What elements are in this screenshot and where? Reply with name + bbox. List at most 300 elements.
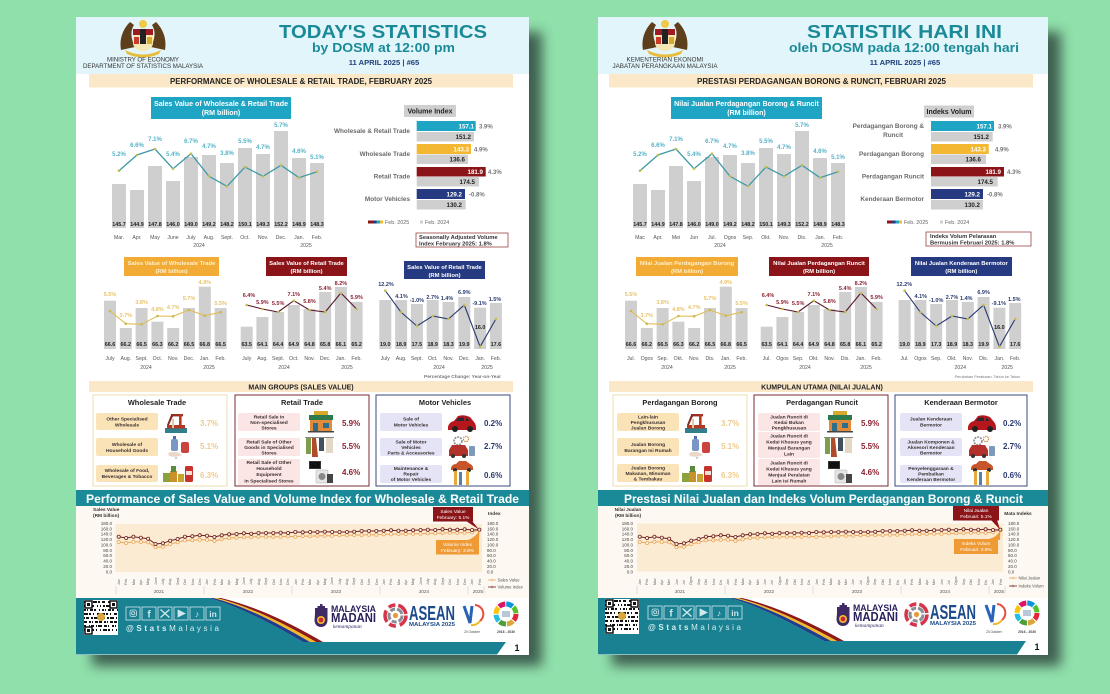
- bar values: 149.3: [777, 222, 791, 228]
- year labels: 2021: [675, 589, 686, 594]
- month labels: Nov: [367, 578, 371, 585]
- month axis: Apr.: [132, 235, 142, 241]
- bar values: 146.0: [687, 222, 701, 228]
- social icons: f: [669, 608, 673, 620]
- growth labels: 1.4%: [441, 296, 453, 302]
- growth labels: 5.9%: [870, 295, 883, 301]
- bar values: 17.5: [412, 342, 422, 348]
- header strip: [598, 17, 1048, 74]
- month axis: Dis.: [841, 356, 850, 362]
- month labels: June: [242, 577, 246, 585]
- growth line: [905, 291, 1015, 347]
- subtitle: by DOSM at 12:00 pm: [312, 40, 455, 55]
- item: parts and accessories: Parts & Accessories: [387, 450, 435, 456]
- bar group: runcit: Perdagangan Runcit: [862, 174, 925, 180]
- bar values: 66.6: [105, 342, 115, 348]
- item: barangan lain: [758, 432, 879, 458]
- callout: nilai jualan: Nilai Jualan: [964, 508, 989, 514]
- legend: Feb. 2024: [425, 220, 449, 226]
- item: barangan isi rumah: Barangan Isi Rumah: [624, 448, 672, 454]
- growth labels: 2.7%: [946, 295, 958, 301]
- month labels: Jul: [947, 580, 951, 585]
- chart title: (RM billion): [290, 269, 323, 275]
- item: non-specialised stores: [238, 411, 360, 432]
- month axis: Nov.: [258, 235, 268, 241]
- right axis title: Index: [488, 511, 501, 517]
- growth line: [247, 293, 357, 312]
- chart title: [266, 257, 347, 276]
- social icons: [126, 607, 220, 620]
- growth line: [385, 291, 496, 347]
- month axis: Oct.: [428, 356, 437, 362]
- month axis: Mei: [672, 235, 680, 241]
- month labels: Sep: [697, 579, 701, 585]
- item: wholesale of household goods: [96, 436, 218, 459]
- chart: time series of sales value and volume index: [76, 506, 529, 598]
- month labels: Aug: [345, 579, 349, 585]
- month axis: Apr.: [653, 235, 663, 241]
- month labels: Okt: [793, 579, 797, 585]
- bar values: 64.9: [289, 342, 299, 348]
- month labels: Feb: [213, 579, 217, 585]
- growth labels: 8.2%: [855, 281, 867, 287]
- month labels: June: [330, 577, 334, 585]
- growth labels: 5.5%: [272, 301, 284, 307]
- right axis: 80.0: [1008, 548, 1017, 553]
- panel heading: Wholesale Trade: [128, 398, 186, 407]
- growth labels: 6.7%: [705, 139, 719, 145]
- month labels: Dec: [375, 578, 379, 585]
- growth labels: 12.2%: [378, 282, 394, 288]
- month labels: Dec: [463, 578, 467, 585]
- month labels: Mac: [741, 578, 745, 585]
- growth labels: 4.7%: [688, 305, 701, 311]
- month axis: Dec.: [459, 356, 470, 362]
- chart title: (RM billion): [202, 109, 241, 117]
- bar values: 66.5: [657, 342, 668, 348]
- month labels: Apr: [748, 579, 752, 585]
- growth labels: 4.7%: [256, 145, 270, 151]
- item: parts and accessories: [380, 436, 502, 458]
- ministry name: [83, 56, 204, 70]
- banner heading: Performance of Sales Value and Volume Index for Wholesale & Retail Trade: [86, 492, 519, 506]
- bar values: 148.3: [831, 222, 845, 228]
- growth labels: 4.1%: [915, 294, 927, 300]
- bar values: 19.0: [380, 342, 391, 348]
- growth labels: 6.6%: [130, 143, 144, 149]
- bar values: 66.3: [152, 342, 163, 348]
- bar values: 152.2: [274, 222, 288, 228]
- month axis: Sept.: [272, 356, 284, 362]
- bar values: 148.9: [813, 222, 827, 228]
- date: 11 APRIL 2025 | #65: [870, 58, 941, 67]
- legend: Feb. 2024: [945, 220, 969, 226]
- banner heading: Prestasi Nilai Jualan dan Indeks Volum Perdagangan Borong & Runcit: [624, 492, 1023, 506]
- growth labels: -9.1%: [472, 301, 487, 307]
- bar group: retail: Retail Trade: [374, 174, 410, 180]
- month axis: 2025: [203, 365, 215, 371]
- indeks volum heading: [924, 106, 974, 118]
- bar group: wholesale and retail: 151.2: [456, 134, 472, 141]
- month labels: July: [338, 578, 342, 585]
- month labels: Aug: [433, 579, 437, 585]
- icon: coat of arms: [120, 20, 166, 58]
- bar values: 66.1: [856, 342, 866, 348]
- month labels: June: [419, 577, 423, 585]
- item: jualan kenderaan: Jualan Kenderaan: [910, 416, 952, 422]
- bar group: motor vehicles: [365, 189, 485, 210]
- item: maintenance and repair: Maintenance &: [394, 466, 429, 472]
- panel heading: Motor Vehicles: [419, 398, 471, 407]
- chart title: Nilai Jualan Kenderaan Bermotor: [915, 261, 1008, 267]
- item: makanan minuman tembakau: 6.3%: [721, 471, 739, 480]
- item: wholesale of food: [96, 465, 218, 482]
- right axis: 100.0: [1008, 542, 1020, 548]
- growth labels: 4.6%: [813, 149, 827, 155]
- item: sale of motor vehicles: Sale of: [403, 416, 419, 422]
- growth labels: 5.2%: [633, 152, 647, 158]
- month axis: Ogos: [724, 235, 737, 241]
- month axis: Jul.: [901, 356, 909, 362]
- month axis: Feb.: [351, 356, 362, 362]
- growth labels: 4.8%: [672, 307, 685, 313]
- logo: sdg wheel: 2016 - 2030: [1018, 630, 1036, 634]
- item: makanan minuman tembakau: Jualan Borong: [631, 466, 665, 472]
- sales value line: [640, 530, 1000, 547]
- bar values: 152.2: [795, 222, 809, 228]
- left axis: 40.0: [103, 559, 112, 564]
- social icons: [648, 606, 742, 620]
- year labels: 2022: [764, 589, 775, 594]
- bar values: 149.0: [705, 222, 719, 228]
- month labels: Mei: [932, 579, 936, 585]
- qr code: [84, 600, 118, 635]
- item: household equipment: in Specialised Stores: [244, 478, 294, 484]
- bar values: 66.1: [336, 342, 346, 348]
- chart title: Sales Value of Wholesale Trade: [128, 261, 216, 267]
- growth labels: 5.7%: [704, 296, 716, 302]
- item: non-specialised stores: Non-specialised: [250, 420, 288, 426]
- month labels: Dec: [286, 578, 290, 585]
- bar values: 145.7: [112, 222, 126, 228]
- bars: [379, 297, 502, 349]
- growth labels: 4.8%: [151, 307, 164, 313]
- item: barangan lain: Lain: [784, 452, 794, 458]
- year labels: 2025: [994, 589, 1005, 594]
- bar group: runcit: 4.3%: [1007, 170, 1021, 176]
- bar values: 16.0: [475, 325, 485, 331]
- month labels: Jun: [851, 579, 855, 585]
- bars: [241, 287, 363, 349]
- item: maintenance and repair: [380, 461, 502, 485]
- panel: perdagangan runcit: [754, 395, 888, 486]
- item: non-specialised stores: Stores: [261, 426, 277, 432]
- bar group: borong dan runcit: Perdagangan Borong &: [853, 123, 924, 130]
- month labels: Jan: [470, 579, 474, 585]
- month labels: Aug: [257, 579, 261, 585]
- month labels: Jan: [294, 579, 298, 585]
- growth labels: -9.1%: [992, 301, 1006, 307]
- month labels: Jul: [682, 580, 686, 585]
- item: peralatan isi rumah: Menjual Peralatan: [768, 472, 810, 478]
- left axis title: Nilai Jualan: [615, 507, 641, 513]
- social icons: ♪: [717, 608, 721, 618]
- ministry name: JABATAN PERANGKAAN MALAYSIA: [612, 63, 718, 70]
- month labels: Feb: [478, 579, 482, 585]
- item: lain-lain pengkhususan: Lain-lain: [638, 414, 658, 420]
- growth labels: -1.0%: [410, 298, 424, 304]
- month labels: May: [235, 578, 239, 585]
- callout: volume index: February: 3.9%: [441, 548, 475, 554]
- growth labels: 7.1%: [288, 292, 300, 298]
- month labels: Jan: [382, 579, 386, 585]
- growth labels: 1.5%: [1008, 297, 1021, 303]
- left axis: 140.0: [101, 532, 112, 537]
- growth labels: 5.5%: [104, 292, 116, 298]
- item: peralatan isi rumah: Lain Isi Rumah: [772, 478, 806, 484]
- bar values: 66.2: [642, 342, 652, 348]
- month axis: Dec.: [184, 356, 194, 362]
- month axis: July: [381, 356, 390, 362]
- panel heading: Retail Trade: [281, 398, 323, 407]
- month labels: Jul: [859, 580, 863, 585]
- month labels: Mac: [829, 578, 833, 585]
- item: household equipment: [238, 459, 360, 485]
- month labels: Mei: [756, 579, 760, 585]
- month labels: Dec: [198, 578, 202, 585]
- month labels: Apr: [925, 579, 929, 585]
- item: sale of motor vehicles: Motor Vehicles: [394, 422, 429, 428]
- volume index line: [640, 529, 1000, 544]
- poster background: [598, 17, 1048, 655]
- left axis: 20.0: [624, 564, 633, 569]
- month axis: July: [242, 356, 252, 362]
- growth labels: 5.9%: [256, 300, 269, 306]
- month axis: Jan.: [200, 356, 210, 362]
- month axis: June: [167, 235, 179, 241]
- month axis: July: [186, 235, 196, 241]
- item: kedai bukan pengkhususan: [758, 411, 879, 432]
- month labels: Sept: [352, 578, 356, 585]
- left axis: 100.0: [622, 542, 633, 548]
- bar values: 19.9: [978, 342, 989, 348]
- bar group: runcit: 181.9: [986, 169, 1002, 176]
- bar values: 18.3: [963, 342, 973, 348]
- bar values: 150.1: [238, 222, 252, 228]
- chart title: Nilai Jualan Perdagangan Borong & Runcit: [674, 100, 819, 108]
- item: sale of motor vehicles: 0.2%: [484, 419, 502, 428]
- ministry name: MINISTRY OF ECONOMY: [107, 56, 179, 64]
- month labels: June: [154, 577, 158, 585]
- month axis: Jan.: [294, 235, 304, 241]
- item: wholesale of food: 6.3%: [200, 471, 218, 480]
- month axis: 2025: [300, 243, 312, 249]
- bar group: kenderaan bermotor: Kenderaan Bermotor: [860, 196, 925, 203]
- left axis: 180.0: [622, 521, 633, 526]
- bar group: wholesale: 136.6: [450, 156, 466, 164]
- bar group: retail: 181.9: [468, 169, 484, 176]
- item: komponen dan aksesori: 2.7%: [1003, 442, 1021, 451]
- right axis: 60.0: [1008, 553, 1017, 558]
- bar group: motor vehicles: 130.2: [447, 202, 463, 209]
- logo: malaysia madani: MALAYSIA: [853, 603, 898, 614]
- item: komponen dan aksesori: Bermotor: [920, 450, 942, 456]
- month axis: Aug.: [204, 235, 214, 241]
- seasonally adjusted note: Index February 2025: 1.8%: [419, 242, 492, 248]
- panel: retail trade: [235, 395, 369, 486]
- logo: hand sign: [986, 604, 1005, 634]
- month labels: Jan: [638, 579, 642, 585]
- month labels: Sep: [962, 579, 966, 585]
- month labels: July: [249, 578, 253, 585]
- bars: [899, 297, 1021, 349]
- poster: Malay edition: [598, 17, 1048, 655]
- growth labels: 8.2%: [335, 281, 347, 287]
- bar group: wholesale: 4.9%: [474, 148, 488, 154]
- growth labels: 6.9%: [977, 290, 990, 296]
- month axis: 2025: [341, 365, 353, 371]
- main groups heading: [609, 381, 1033, 392]
- growth labels: 6.4%: [243, 293, 255, 299]
- panel: motor vehicles: [376, 395, 510, 486]
- year labels: 2021: [154, 589, 165, 594]
- item: jualan kenderaan: [900, 413, 1021, 432]
- growth labels: 6.6%: [651, 143, 665, 149]
- growth labels: 3.8%: [220, 151, 234, 157]
- growth labels: 5.5%: [238, 139, 252, 145]
- chart title: (RM billion): [428, 273, 461, 279]
- chart: wholesale trade sales value: [104, 257, 227, 371]
- item: lain-lain pengkhususan: Jualan Borong: [631, 426, 665, 432]
- volume index line: [119, 529, 479, 544]
- month labels: Feb: [645, 579, 649, 585]
- month labels: Dis: [984, 580, 988, 585]
- chart title: Nilai Jualan Perdagangan Borong: [640, 261, 735, 267]
- chart title: [911, 257, 1012, 276]
- month axis: Ogos: [776, 356, 789, 362]
- volume index heading: Volume Index: [408, 108, 453, 116]
- month axis: Sep.: [793, 356, 803, 362]
- right axis: 120.0: [487, 537, 499, 542]
- bars: [112, 131, 324, 228]
- bar group: kenderaan bermotor: [860, 189, 1003, 210]
- item: wholesale of household goods: Household Goods: [106, 448, 148, 454]
- chart: retail trade sales value: [241, 257, 363, 371]
- item: household equipment: Household: [256, 466, 282, 472]
- left axis title: Sales Value: [93, 507, 120, 513]
- callout: sales value: February: 5.1%: [437, 515, 470, 521]
- item: peralatan isi rumah: 4.6%: [861, 468, 879, 477]
- item: barangan isi rumah: 5.1%: [721, 442, 739, 451]
- item: maintenance and repair: Repair: [403, 472, 419, 478]
- bar group: retail: [374, 167, 502, 186]
- bar values: 66.6: [626, 342, 636, 348]
- poster background: [76, 17, 529, 655]
- social icons: in: [209, 609, 217, 619]
- section heading band: [609, 74, 1033, 88]
- panel heading: Perdagangan Runcit: [786, 398, 858, 407]
- left axis: 80.0: [624, 548, 633, 553]
- month axis: Jan.: [336, 356, 346, 362]
- month axis: 2025: [724, 365, 736, 371]
- chart title: Sales Value of Retail Trade: [407, 265, 483, 271]
- month labels: Sept: [176, 578, 180, 585]
- footer: [598, 598, 1040, 654]
- growth labels: 5.5%: [759, 139, 773, 145]
- bar values: 147.8: [148, 222, 162, 228]
- chart title: [124, 257, 219, 276]
- month axis: Okt.: [761, 235, 771, 241]
- chart: indeks volum: [853, 106, 1031, 246]
- month axis: Oct.: [240, 235, 250, 241]
- callout: sales value: [433, 507, 479, 530]
- item: lain-lain pengkhususan: 3.7%: [721, 419, 739, 428]
- item: kedai bukan pengkhususan: Pengkhususan: [772, 426, 806, 432]
- month axis: Mar.: [114, 235, 124, 241]
- month labels: Oct: [360, 579, 364, 585]
- poster shadow: right: [612, 32, 1061, 666]
- growth labels: 7.1%: [808, 292, 820, 298]
- growth labels: 1.4%: [960, 296, 973, 302]
- legend: [887, 220, 969, 226]
- bar values: 146.0: [166, 222, 180, 228]
- month axis: 2025: [1002, 365, 1013, 371]
- left axis: 0.0: [106, 569, 112, 574]
- bar group: wholesale and retail: 157.1: [459, 124, 475, 130]
- month labels: Feb: [301, 579, 305, 585]
- month axis: Feb.: [312, 235, 322, 241]
- poster shadow: left: [92, 32, 542, 666]
- month labels: Feb: [734, 579, 738, 585]
- month labels: Feb: [999, 579, 1003, 585]
- item: other specialised wholesale: 3.7%: [200, 419, 218, 428]
- catatan indeks volum pelarasan bermusim: [926, 232, 1031, 246]
- left axis: 40.0: [624, 559, 633, 564]
- logo: malaysia madani: [836, 603, 898, 629]
- month axis: Oct.: [153, 356, 162, 362]
- month labels: Ogos: [954, 576, 958, 585]
- bar group: retail: 174.5: [460, 179, 476, 186]
- social handle: @Stats Malaysia: [648, 623, 742, 632]
- ribbon stripes: [730, 598, 844, 641]
- month labels: Jun: [675, 579, 679, 585]
- month axis: Jul.: [627, 356, 635, 362]
- logo: malaysia madani: kemampanan: [333, 624, 362, 630]
- logo: sdg wheel: [496, 604, 516, 634]
- callout: nilai jualan: [953, 506, 1000, 530]
- growth labels: 5.1%: [310, 155, 324, 161]
- month labels: Dis: [896, 580, 900, 585]
- month labels: Okt: [881, 579, 885, 585]
- month axis: Nov.: [168, 356, 178, 362]
- page number: 1: [1034, 642, 1040, 652]
- right axis: 20.0: [1008, 564, 1017, 569]
- month axis: Dis.: [798, 235, 806, 241]
- chart title: [404, 261, 485, 279]
- chart title: [636, 257, 738, 276]
- logo: hand sign: [464, 605, 483, 634]
- bar values: 64.4: [273, 342, 283, 348]
- bar group: wholesale: [360, 144, 488, 164]
- month axis: Dis.: [706, 356, 714, 362]
- chart title: [769, 257, 869, 276]
- month axis: Feb.: [491, 356, 501, 362]
- main groups heading: [89, 381, 513, 392]
- item: other goods in specialised stores: Retail Sale of Other: [246, 440, 292, 446]
- bar values: 65.2: [871, 342, 882, 348]
- bar group: motor vehicles: -0.8%: [469, 192, 485, 198]
- growth line: [119, 149, 317, 186]
